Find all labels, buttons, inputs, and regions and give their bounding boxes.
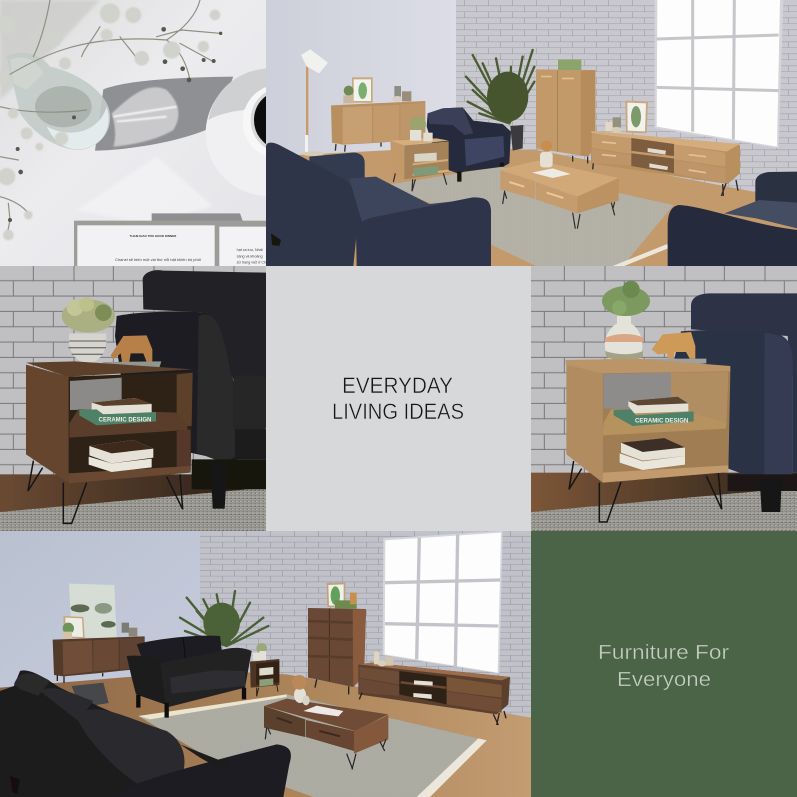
small book on table [103,361,161,368]
striped planter [68,333,106,367]
walnut TV console [358,652,510,725]
tall oak cabinet [536,59,595,163]
small plant and jars on sideboard [343,86,411,103]
shadow of vase [95,77,233,151]
tall walnut cabinet [308,608,366,694]
black leather sofa, foreground [0,670,291,797]
floor lamp [301,49,328,156]
leaf print on console [605,101,648,133]
glass vase [7,53,110,150]
oak end table [566,359,730,522]
oak TV console [591,131,740,196]
open book: sử trang viết ở Chi [237,261,267,265]
walnut end table [26,361,193,523]
panel: oak side table photo [531,266,797,531]
open book: sáng và khoảng [237,254,262,258]
navy sofa, foreground left [266,143,491,266]
window [383,531,503,674]
panel: table still life photo [0,0,267,266]
tagline text: Everyone [617,668,711,691]
open book: hạt xa lưu, Nhất [237,248,263,252]
wood floor [266,147,797,266]
print and plant on cabinet [327,582,357,609]
foliage [602,281,650,316]
books on oak table [614,397,694,470]
oak sideboard [331,101,425,152]
walnut coffee table [264,675,388,769]
panel: walnut side table photo [0,266,266,531]
brick wall [200,531,531,721]
window [655,0,783,148]
tall palm plant [466,50,534,151]
title text [332,373,464,424]
wooden rhino figure [652,332,695,359]
wood floor [531,473,797,514]
baby's breath flowers [0,3,222,240]
open book: THAM GIAO TRO GOOD DINNER [130,234,177,238]
title text: LIVING IDEAS [332,399,464,424]
open book [74,213,267,266]
tagline text: Furniture For [598,641,729,664]
panel: walnut living room photo [0,531,531,797]
black leather sofa [115,270,266,509]
framed leaf print [352,77,373,103]
oak side table [390,116,449,191]
woven rug [0,488,266,532]
small book on table [638,359,706,365]
panel: oak living room photo [266,0,797,266]
coffee saucer and cup [206,68,331,196]
woven rug [138,694,487,797]
brick wall [0,266,266,479]
panel: center title block [266,266,531,531]
walnut sideboard [53,636,145,683]
light caustic in shadow [112,87,178,147]
woven rug [386,167,673,266]
flower bouquet [62,297,115,333]
panel: green tagline block [531,531,797,797]
wooden rhino figure [111,335,152,362]
baby's breath branches [0,0,220,233]
abstract botanical canvas [69,584,117,638]
plain wall [0,531,200,691]
striped vase [605,316,644,363]
books on walnut table [79,398,156,472]
open book: Chanel sẽ biến một vài thứ nổi bật khiến bộ phối [115,257,201,262]
brick wall [531,266,797,476]
wood floor [0,671,531,797]
books on walnut table: CERAMIC DESIGN [99,416,152,423]
title text: EVERYDAY [342,373,453,398]
brick wall [456,0,797,207]
framed print and small plant [63,616,137,640]
wood floor [0,474,266,514]
woven rug [531,488,797,532]
palm plant [180,591,268,646]
plain wall [266,0,456,160]
walnut small side table [250,643,279,696]
oak coffee table [500,140,619,229]
black leather loveseat [127,636,252,718]
navy armchair [427,107,511,182]
books on oak table: CERAMIC DESIGN [635,418,689,425]
tagline text [598,641,729,691]
navy sofa [671,293,797,512]
navy sofa, foreground right [668,172,797,266]
